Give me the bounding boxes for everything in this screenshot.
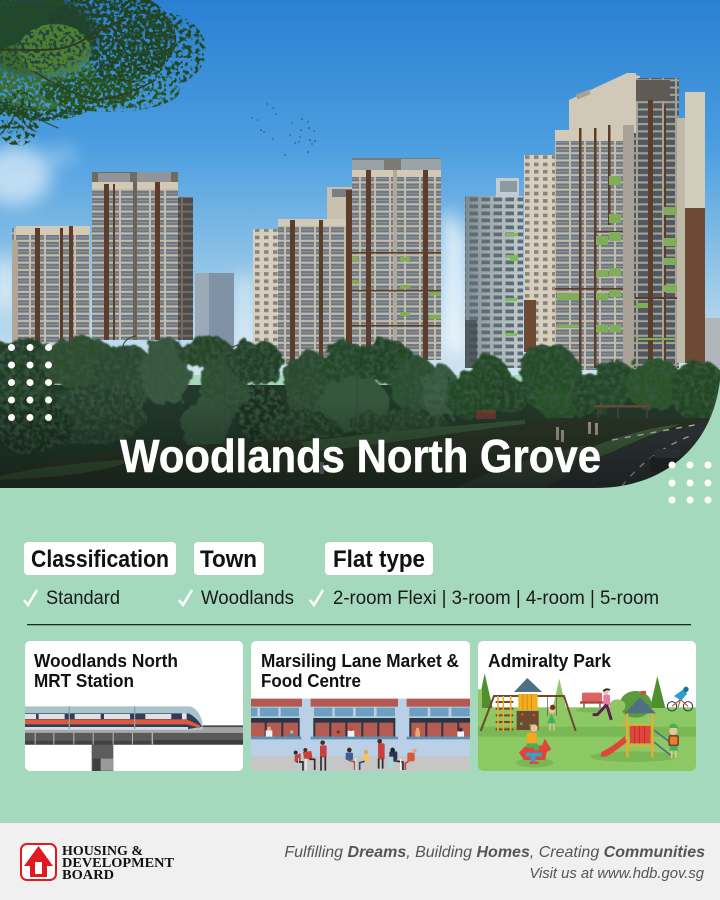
shelter xyxy=(594,405,650,418)
icon: playground scene xyxy=(474,673,701,774)
lawn xyxy=(122,418,710,470)
tower block 2 xyxy=(92,172,193,340)
value: woodlands: Woodlands xyxy=(201,588,294,609)
footer band xyxy=(0,823,720,900)
info: town xyxy=(179,542,294,609)
heading chip: town: Town xyxy=(200,546,257,573)
bench xyxy=(580,693,603,708)
lamp posts xyxy=(122,336,402,450)
check icon xyxy=(24,590,37,605)
tree canopy top left xyxy=(0,0,206,146)
website: Visit us at www.hdb.gov.sg xyxy=(529,866,705,882)
birds xyxy=(251,103,316,156)
diners xyxy=(294,739,417,771)
HDB logo xyxy=(21,843,174,882)
distant tower xyxy=(209,273,234,348)
hero shading xyxy=(0,412,704,488)
cyclist xyxy=(667,687,693,711)
sky xyxy=(0,0,720,375)
tower block 3 xyxy=(253,158,441,365)
card: Marsiling Lane Market & Food Centre xyxy=(248,641,475,773)
icon: MRT train on viaduct xyxy=(25,706,243,773)
check icon xyxy=(310,590,323,605)
heading chip: flat type: Flat type xyxy=(333,546,425,573)
decorative dots: left xyxy=(8,344,52,421)
card heading: MRT Station xyxy=(34,670,134,691)
clouds xyxy=(0,145,464,353)
hero photo: residential towers xyxy=(0,0,720,488)
card: Admiralty Park xyxy=(474,641,701,774)
title: Woodlands North Grove xyxy=(120,430,601,482)
tower block 1 xyxy=(12,226,90,343)
card heading: Woodlands North xyxy=(34,650,178,671)
icon: HDB red house arrow xyxy=(21,844,56,880)
tower block 5 xyxy=(524,73,705,370)
second play structure xyxy=(601,691,671,758)
logo wordmark: HOUSING & xyxy=(62,843,143,858)
card: Woodlands North MRT Station xyxy=(25,641,243,773)
card heading: Food Centre xyxy=(261,670,361,691)
card heading: Admiralty Park xyxy=(488,650,612,671)
tower block 4 xyxy=(465,178,523,368)
logo wordmark: DEVELOPMENT xyxy=(62,855,174,870)
child on rocking horse xyxy=(519,724,551,764)
boy with hat xyxy=(668,723,679,758)
check icon xyxy=(179,590,192,605)
value: standard: Standard xyxy=(46,588,120,609)
card heading: Marsiling Lane Market & xyxy=(261,650,459,671)
info: classification xyxy=(24,542,176,609)
info: flat type xyxy=(310,542,659,609)
foliage and ground xyxy=(0,336,720,488)
road xyxy=(558,420,709,488)
heading chip: classification: Classification xyxy=(31,546,169,573)
runner xyxy=(593,689,611,720)
tagline: Fulfilling Dreams, Building Homes, Creating Communities xyxy=(284,844,705,861)
people xyxy=(556,422,598,442)
stall vendors xyxy=(266,727,464,737)
car xyxy=(650,449,682,462)
logo wordmark: BOARD xyxy=(62,867,114,882)
icon: hawker centre with diners xyxy=(248,699,475,773)
girl on swing xyxy=(547,696,557,731)
value: flat types: 2-room Flexi | 3-room | 4-room | 5-room xyxy=(333,588,659,609)
decorative dots: right xyxy=(668,462,712,504)
